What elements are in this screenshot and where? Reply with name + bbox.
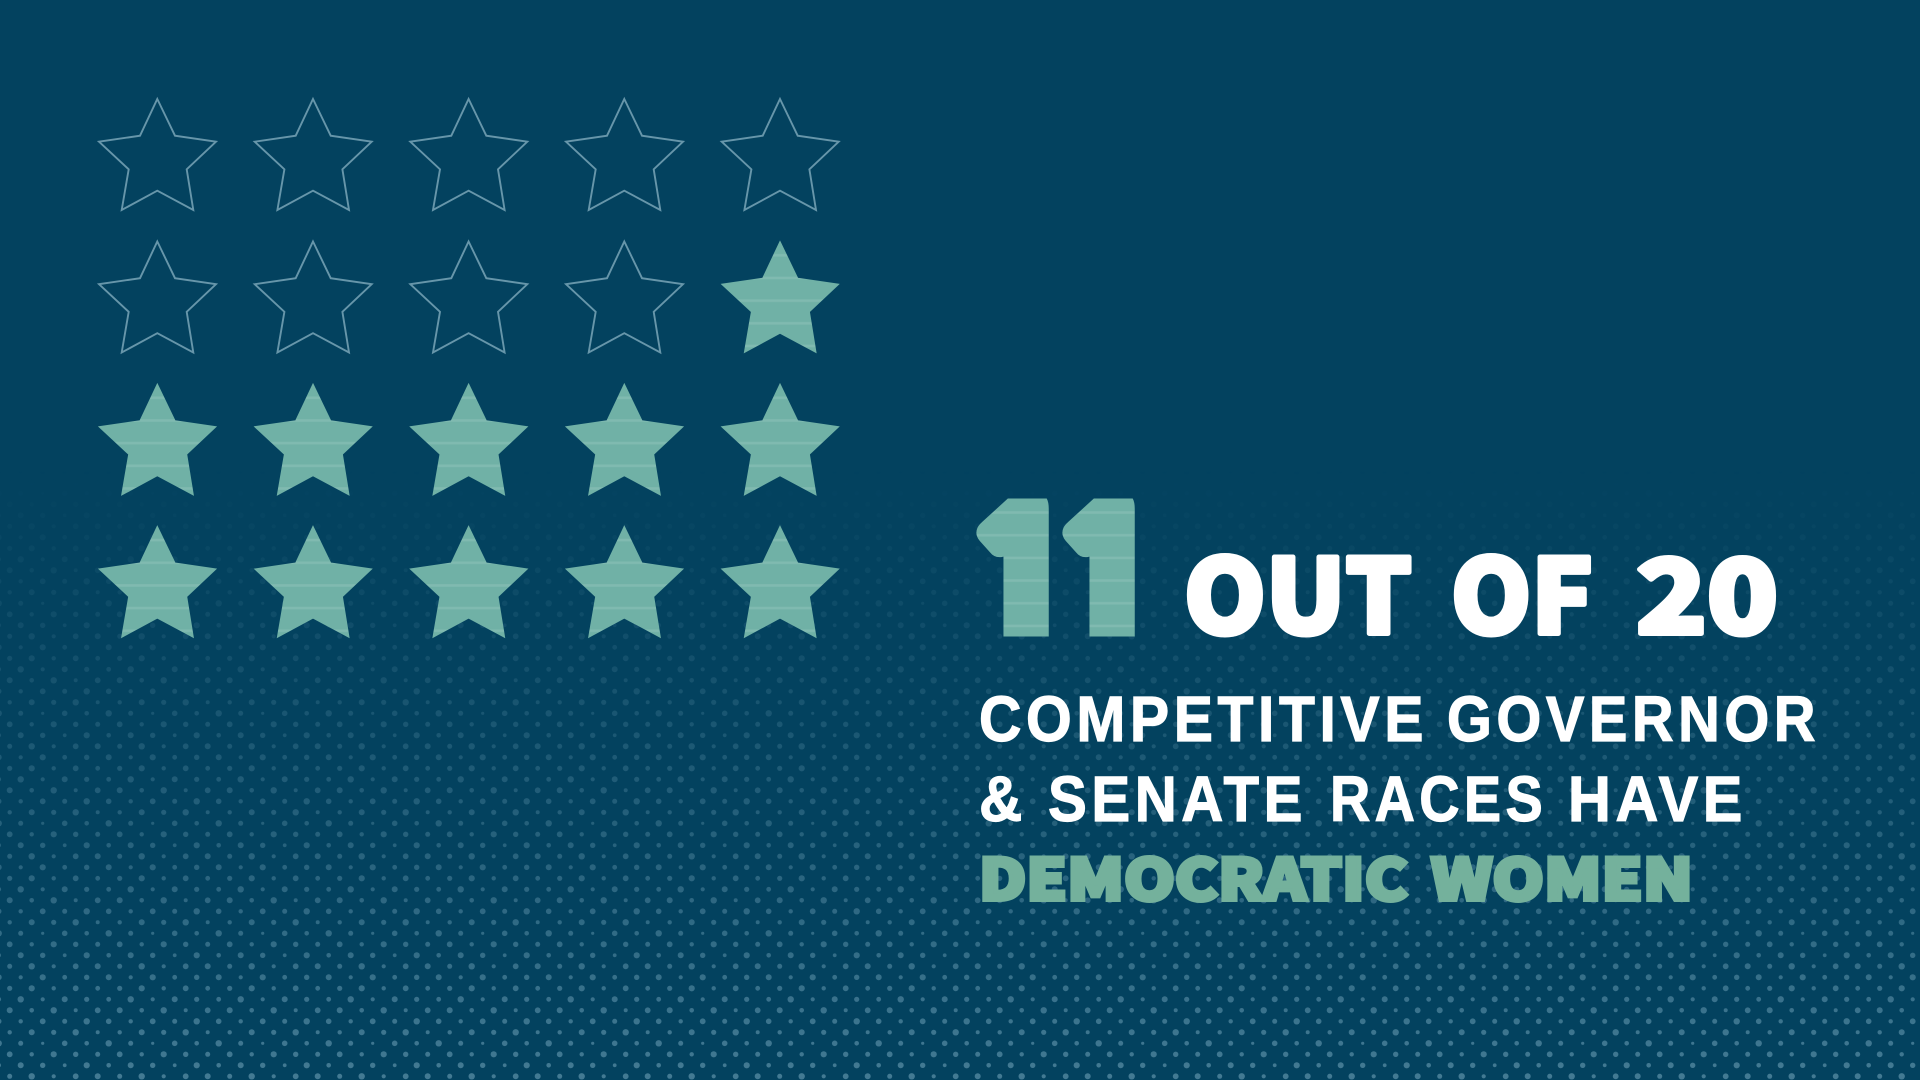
headline: out of 20: OUT	[1184, 514, 1412, 664]
text: & senate races have: RACES	[1330, 763, 1547, 835]
row 3: filled stars	[99, 384, 839, 495]
row 4: filled stars	[99, 526, 839, 637]
text: & senate races have	[979, 763, 1747, 835]
text: competitive governor	[979, 683, 1820, 755]
halftone dot pattern	[0, 578, 1916, 1080]
headline: out of 20: OF	[1451, 514, 1593, 664]
row 2: filled star	[722, 242, 839, 352]
headline number: 1	[967, 488, 1077, 666]
text: competitive governor: COMPETITIVE	[979, 683, 1428, 755]
headline number	[976, 498, 1135, 636]
headline: out of 20: 20	[1636, 514, 1778, 664]
text: & senate races have: &	[979, 763, 1027, 835]
row 2: outline stars	[99, 242, 683, 352]
text: & senate races have: SENATE	[1048, 763, 1307, 835]
text: democratic women	[979, 835, 1693, 917]
text: democratic women: WOMEN	[1431, 835, 1693, 917]
headline: out of 20	[1184, 514, 1778, 664]
row 1: outline stars	[99, 99, 839, 210]
star grid: 11 of 20 filled	[99, 99, 839, 637]
text: democratic women: DEMOCRATIC	[979, 835, 1408, 917]
headline number: 1	[1053, 488, 1163, 666]
text: competitive governor: GOVERNOR	[1447, 683, 1820, 755]
text: & senate races have: HAVE	[1568, 763, 1747, 835]
